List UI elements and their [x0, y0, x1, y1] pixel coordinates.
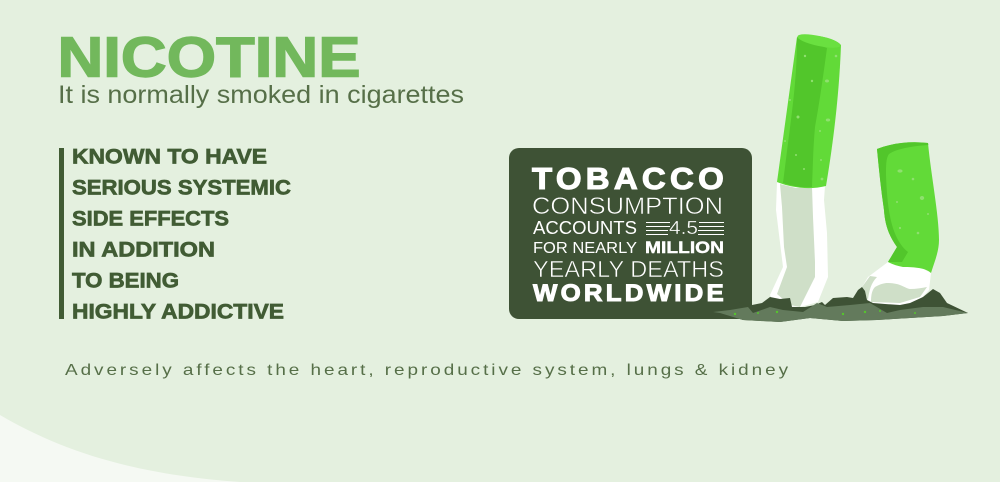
panel: tobacco statistic: ACCOUNTS: [533, 218, 637, 238]
panel: tobacco statistic: FOR NEARLY: [533, 240, 637, 257]
icon: ash pile: [713, 287, 968, 322]
subtitle: It is normally smoked in cigarettes: [58, 81, 464, 109]
panel: tobacco statistic: YEARLY DEATHS: [533, 256, 724, 282]
caption: Adversely affects the heart, reproductive system, lungs & kidney: [65, 362, 791, 379]
panel: tobacco statistic: MILLION: [645, 239, 724, 257]
text block: side effects list: KNOWN TO HAVE: [72, 146, 267, 168]
panel: tobacco statistic: CONSUMPTION: [532, 193, 723, 220]
text block: side effects list: IN ADDITION: [72, 238, 215, 262]
text block: side effects list: SIDE EFFECTS: [72, 208, 229, 230]
text block: side effects list: HIGHLY ADDICTIVE: [72, 300, 284, 324]
panel: tobacco statistic: [509, 148, 752, 319]
text block: side effects list: [59, 146, 291, 324]
panel: tobacco statistic: WORLDWIDE: [533, 280, 727, 307]
panel: tobacco statistic: TOBACCO: [532, 161, 728, 196]
icon: crushed cigarette butt: [862, 142, 939, 305]
text block: side effects list: SERIOUS SYSTEMIC: [72, 176, 291, 200]
icon: tall cigarette butt: [770, 32, 842, 307]
title: NICOTINE: [58, 26, 360, 90]
text block: side effects list: TO BEING: [72, 270, 179, 292]
panel: tobacco statistic: 4.5: [669, 218, 698, 238]
